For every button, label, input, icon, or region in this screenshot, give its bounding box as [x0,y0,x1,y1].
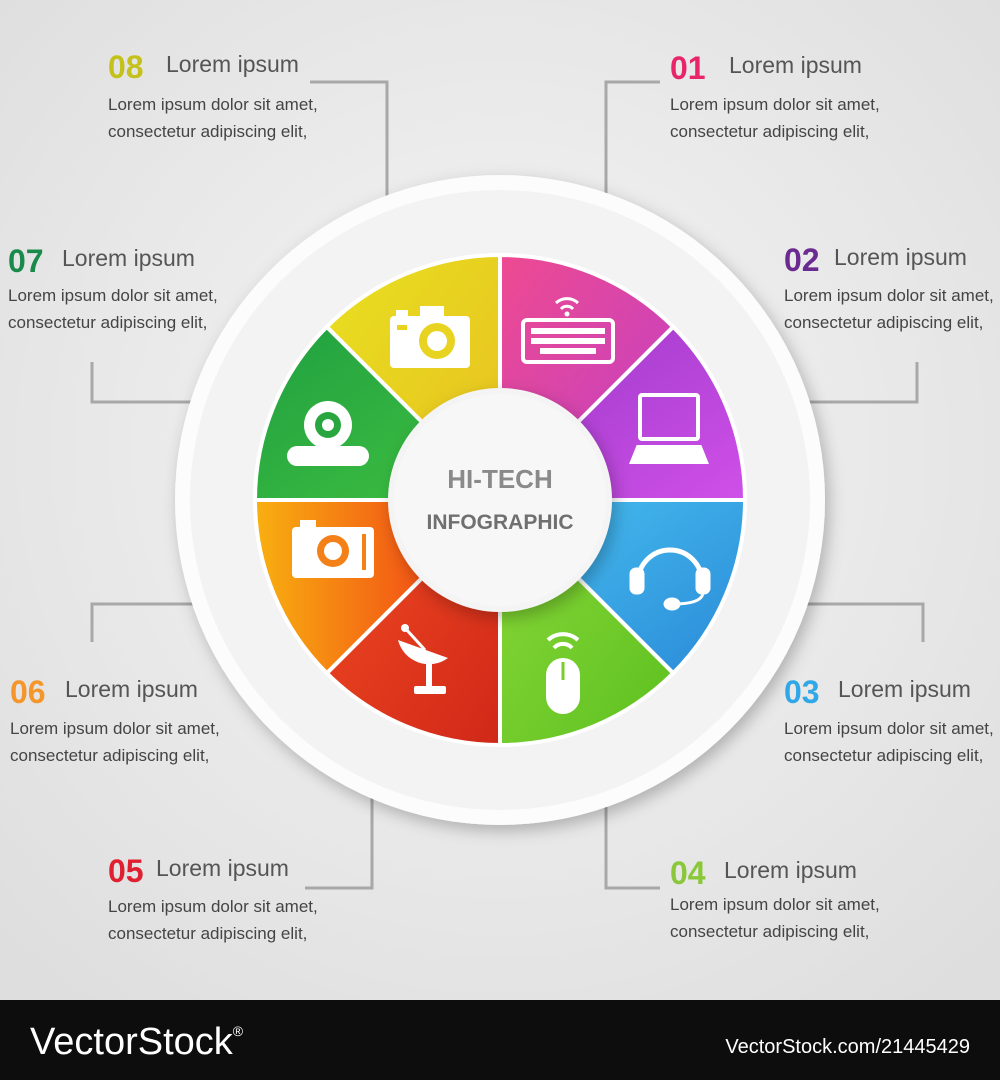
text block 04: 04 [670,855,706,891]
segment 02 [500,327,745,500]
text block 07: Lorem ipsum [62,245,195,271]
segment 04 [500,500,673,745]
text block 05: consectetur adipiscing elit, [108,924,307,943]
text block 01: 01 [670,50,706,86]
text block 06: Lorem ipsum [65,676,198,702]
text block 03 [784,674,994,765]
text block 08: Lorem ipsum [166,51,299,77]
text block 02: Lorem ipsum [834,244,967,270]
text block 05: 05 [108,853,144,889]
text block 03: Lorem ipsum [838,676,971,702]
footer bar [0,1000,1000,1080]
text block 04 [670,855,880,941]
text block 02 [784,242,994,332]
text block 04: Lorem ipsum [724,857,857,883]
text block 03: consectetur adipiscing elit, [784,746,983,765]
center circle [388,388,612,612]
text block 06: 06 [10,674,46,710]
text block 01: Lorem ipsum [729,52,862,78]
segment 03 [500,500,745,673]
icon: laptop [632,395,706,462]
text block 01: Lorem ipsum dolor sit amet, [670,95,880,114]
text block 08 [108,49,318,141]
text block 02: consectetur adipiscing elit, [784,313,983,332]
footer bar: VectorStock [30,1021,233,1063]
text block 05 [108,853,318,943]
center circle: INFOGRAPHIC [426,511,574,534]
text block 03: 03 [784,674,820,710]
text block 04: consectetur adipiscing elit, [670,922,869,941]
segment 06 [255,500,500,673]
text block 01 [670,50,880,141]
text block 03: Lorem ipsum dolor sit amet, [784,719,994,738]
icon: webcam [287,401,369,466]
text block 01: consectetur adipiscing elit, [670,122,869,141]
text block 06 [10,674,220,765]
footer bar: VectorStock.com/21445429 [725,1036,970,1058]
icon: satellite dish [398,624,448,694]
text block 07: 07 [8,243,44,279]
text block 08: Lorem ipsum dolor sit amet, [108,95,318,114]
segment 08 [327,255,500,500]
icon: keyboard [523,299,613,362]
segment 05 [327,500,500,745]
text block 02: Lorem ipsum dolor sit amet, [784,286,994,305]
text block 06: consectetur adipiscing elit, [10,746,209,765]
text block 08: consectetur adipiscing elit, [108,122,307,141]
pie chart [255,255,745,745]
segment 07 [255,327,500,500]
text block 07: consectetur adipiscing elit, [8,313,207,332]
center circle: HI-TECH [447,464,553,494]
text block 06: Lorem ipsum dolor sit amet, [10,719,220,738]
icon: camera 08 [390,306,470,368]
text block 05: Lorem ipsum [156,855,289,881]
text block 07 [8,243,218,332]
footer bar: ® [233,1023,244,1039]
text block 08: 08 [108,49,144,85]
connector lines [92,82,923,888]
icon: mouse [546,634,580,714]
segment 01 [500,255,673,500]
text block 07: Lorem ipsum dolor sit amet, [8,286,218,305]
icon: camera 06 [292,520,374,578]
text block 04: Lorem ipsum dolor sit amet, [670,895,880,914]
icon: headset [632,550,708,608]
text block 05: Lorem ipsum dolor sit amet, [108,897,318,916]
text block 02: 02 [784,242,820,278]
outer ring [175,175,825,825]
